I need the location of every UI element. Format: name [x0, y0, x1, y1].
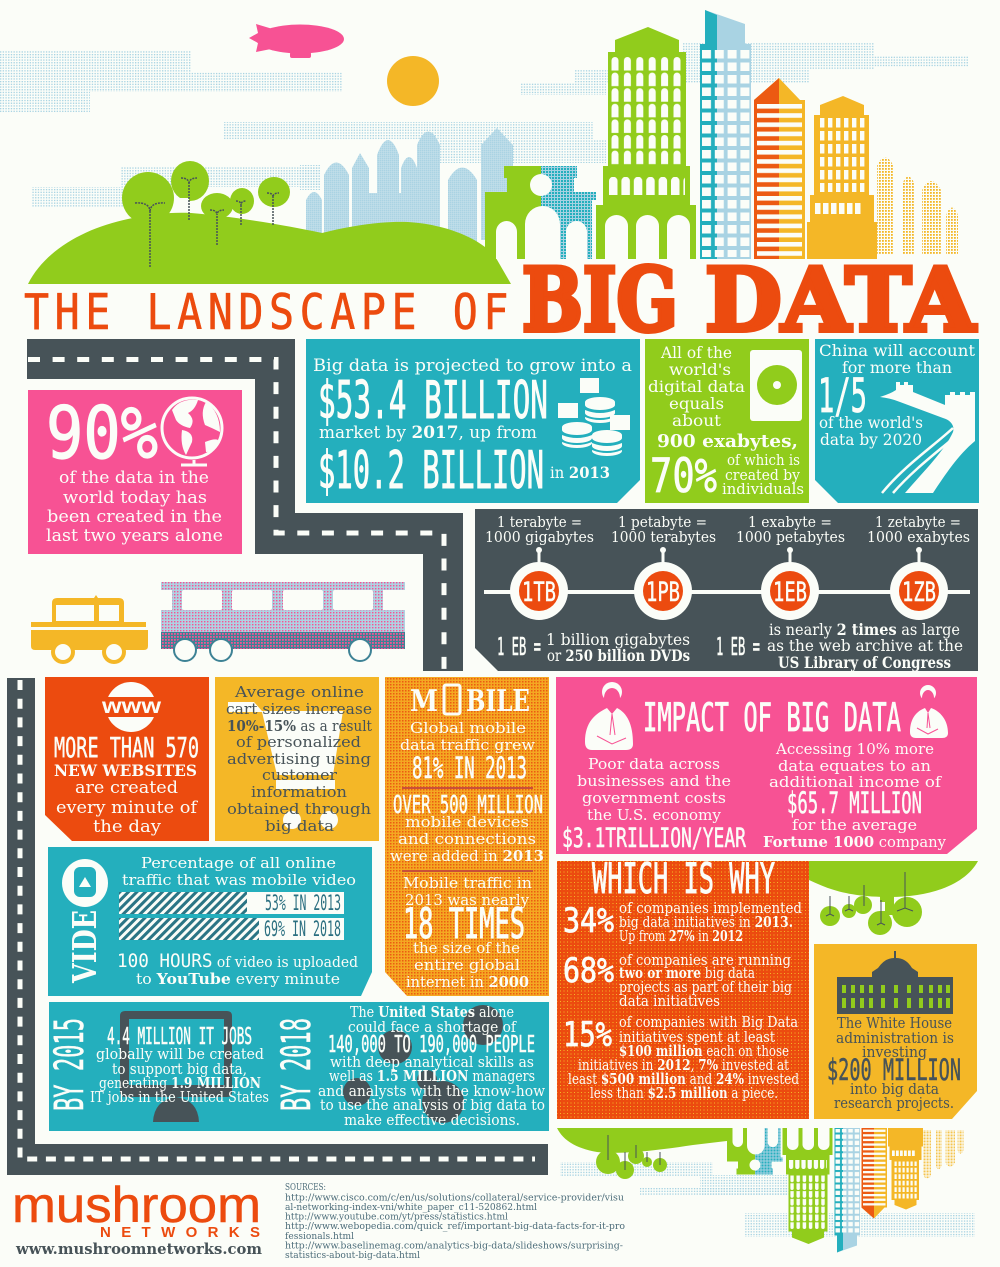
shortage text: The United States alone — [350, 1003, 514, 1021]
stat: devices: OVER 500 MILLION — [393, 790, 543, 819]
text — [819, 341, 976, 449]
icon: www globe: www — [101, 695, 162, 718]
eb comparison left: 1 billion gigabytes — [546, 630, 690, 649]
definitions: 1000 exabytes — [867, 528, 970, 546]
text: data by 2020 — [820, 430, 922, 449]
stat: 18 times: 2013 was nearly — [405, 891, 530, 909]
heading — [410, 684, 530, 719]
text: of personalized — [236, 733, 361, 751]
stat: 15 percent: initiatives in 2012, 7% invested at — [578, 1056, 789, 1074]
clouds — [0, 42, 969, 207]
sun — [387, 56, 439, 106]
definitions: 1000 terabytes — [611, 528, 716, 546]
jobs text: 4.4 MILLION IT JOBS — [107, 1024, 252, 1050]
eb comparison right: as the web archive at the — [767, 636, 963, 655]
intro text: world's — [669, 360, 731, 379]
stat: traffic growth: data traffic grew — [400, 736, 535, 754]
panel: new websites — [45, 677, 209, 841]
right text: data equates to an — [778, 757, 931, 775]
left text: businesses and the — [577, 772, 731, 790]
timeline: 1PB — [646, 577, 680, 608]
stat: 68 percent: projects as part of their big — [619, 978, 792, 996]
panel: white house — [814, 944, 977, 1119]
text: are created — [75, 778, 178, 798]
icon: monitor — [120, 1011, 232, 1122]
stat: 18 times: Mobile traffic in — [403, 874, 532, 892]
timeline: 1ZB — [902, 577, 936, 608]
eb comparison right: 1 EB = — [716, 632, 760, 661]
icon: database stacks — [558, 378, 630, 456]
intro text: digital data — [648, 377, 745, 396]
sources: fessionals.html — [285, 1231, 354, 1242]
intro: Percentage of all online — [141, 854, 336, 872]
timeline: 1EB — [773, 577, 807, 608]
stat: 15 percent: $100 million each on those — [619, 1042, 789, 1060]
definitions: 1000 petabytes — [736, 528, 845, 546]
heading: M — [410, 684, 438, 719]
definitions: 1 zetabyte = — [875, 513, 961, 531]
text: Average online — [234, 683, 364, 701]
shortage text: 140,000 TO 190,000 PEOPLE — [328, 1032, 535, 1058]
sources: SOURCES: — [285, 1182, 326, 1193]
body text — [46, 468, 223, 546]
eb comparison right: is nearly 2 times as large — [769, 620, 960, 639]
body text: of the data in the — [59, 468, 209, 488]
panel: video — [48, 847, 372, 996]
text: obtained through — [227, 800, 371, 818]
definitions: 1 exabyte = — [748, 513, 832, 531]
intro: traffic that was mobile video — [122, 871, 356, 889]
bar chart: 69% IN 2018 — [264, 917, 341, 941]
blimp — [249, 24, 344, 58]
heading: by 2015: BY 2015 — [47, 1018, 93, 1111]
sources: http://www.youtube.com/yt/press/statistics.html — [285, 1212, 508, 1222]
panel: impact — [556, 677, 977, 854]
text: of the world's — [819, 413, 923, 432]
intro text: equals — [669, 394, 724, 413]
panel: online carts — [215, 677, 379, 841]
left text: Poor data across — [588, 755, 720, 773]
vertical word: video: VIDE — [65, 910, 104, 984]
year line: in 2013 — [550, 463, 610, 482]
eb comparison left: 1 EB = — [497, 632, 541, 661]
stat: devices: mobile devices — [405, 813, 529, 831]
tree trunks — [135, 178, 279, 267]
yellow tower — [807, 96, 877, 259]
left text — [562, 755, 746, 854]
text: investing — [862, 1043, 927, 1061]
bar chart: 53% IN 2013 — [265, 891, 341, 915]
stat: 34 percent: of companies implemented — [619, 899, 802, 917]
stat: 68 percent: 68% — [563, 951, 614, 991]
body text: world today has — [63, 488, 207, 508]
left text: the U.S. economy — [587, 806, 722, 824]
green tower — [596, 27, 696, 259]
logo url: www.mushroomnetworks.com — [15, 1240, 262, 1258]
shortage text: to use the analysis of big data to — [320, 1096, 545, 1114]
text: for more than — [842, 358, 952, 377]
text — [226, 683, 372, 835]
orange tower — [754, 78, 805, 259]
eb comparison right: US Library of Congress — [778, 653, 951, 672]
jobs text: IT jobs in the United States — [90, 1088, 269, 1106]
caption: individuals — [722, 480, 804, 498]
inverted trees upper right — [809, 861, 978, 935]
youtube fact: 100 HOURS of video is uploaded — [117, 950, 358, 972]
youtube fact — [117, 950, 358, 988]
stat: 34 percent: big data initiatives in 2013. — [619, 913, 793, 931]
arch building — [485, 166, 596, 259]
title line: the landscape of: THE LANDSCAPE OF — [24, 284, 509, 341]
logo subtitle: NETWORKS — [100, 1224, 260, 1241]
youtube fact: to YouTube every minute — [136, 970, 340, 988]
icon: gears — [343, 1005, 503, 1123]
sources: http://www.cisco.com/c/en/us/solutions/collateral/service-provider/visu — [285, 1192, 624, 1204]
jobs text — [90, 1024, 269, 1106]
heading: BILE — [466, 684, 530, 719]
stat: 68 percent — [563, 951, 792, 1010]
shortage text: and analysts with the know-how — [318, 1082, 545, 1100]
panel: 900 exabytes — [645, 339, 809, 504]
icon: great wall — [880, 382, 975, 493]
market line: market by 2017, up from — [319, 423, 537, 443]
stat: devices: were added in 2013 — [390, 847, 544, 865]
body text: been created in the — [47, 507, 222, 527]
text: the day — [93, 817, 161, 837]
left text: government costs — [582, 789, 726, 807]
big number: 90% — [46, 391, 158, 475]
shortage text: could face a shortage of — [348, 1018, 517, 1036]
eb comparison right — [716, 620, 963, 672]
stat: 68 percent: two or more big data — [619, 964, 755, 982]
timeline — [484, 547, 970, 620]
text — [827, 1014, 961, 1112]
text: China will account — [819, 341, 976, 360]
jobs text: to support big data, — [112, 1060, 247, 1078]
eb comparison left: or 250 billion DVDs — [547, 646, 690, 665]
title word: big: BIG — [522, 248, 678, 352]
jobs text: globally will be created — [96, 1045, 264, 1063]
intro — [122, 854, 356, 889]
stat: 15 percent: of companies with Big Data — [619, 1013, 798, 1031]
panel: data units — [475, 509, 978, 672]
stat: 34 percent: 34% — [563, 901, 614, 941]
title — [24, 248, 977, 352]
text: NEW WEBSITES — [54, 761, 197, 780]
definitions: 1000 gigabytes — [485, 528, 594, 546]
text: research projects. — [834, 1094, 954, 1112]
mirrored clouds — [560, 1162, 975, 1237]
right text: Fortune 1000 company — [763, 833, 947, 851]
text: advertising using — [227, 750, 371, 768]
definitions — [485, 513, 970, 546]
logo wordmark: mushroom — [12, 1177, 261, 1233]
icon: left person — [585, 682, 633, 750]
stat: 68 percent: of companies are running — [619, 951, 791, 969]
panel: china — [815, 339, 979, 503]
stat: devices — [390, 790, 544, 865]
stat: traffic growth: 81% IN 2013 — [412, 751, 527, 785]
icon: taxi — [31, 595, 148, 664]
stat: traffic growth — [400, 719, 535, 785]
icon: right person — [910, 685, 948, 738]
sources — [285, 1182, 625, 1261]
shortage text: well as 1.5 MILLION managers — [329, 1067, 535, 1085]
right text: Accessing 10% more — [775, 740, 934, 758]
emphasis: 900 exabytes, — [657, 431, 798, 452]
definitions: 1 petabyte = — [618, 513, 707, 531]
text: into big data — [850, 1080, 939, 1098]
panel: market growth — [306, 339, 640, 503]
stat: 18 times — [403, 874, 532, 991]
text: administration is — [836, 1029, 954, 1047]
panel: which is why — [557, 854, 809, 1119]
jobs text: generating 1.9 MILLION — [99, 1074, 261, 1092]
sources: statistics-about-big-data.html — [285, 1250, 420, 1261]
road: upper — [27, 339, 463, 671]
panel: mobile — [385, 677, 549, 996]
shortage text — [318, 1003, 545, 1129]
stat: 18 times: 18 TIMES — [403, 899, 525, 948]
figure: 10.2 billion: $10.2 BILLION — [318, 441, 544, 501]
text: 10%-15% as a result — [227, 717, 372, 735]
city — [485, 10, 958, 259]
intro text: about — [672, 411, 722, 430]
right text — [763, 740, 947, 851]
intro text: All of the — [660, 343, 732, 362]
stat: devices: and connections — [398, 830, 536, 848]
intro line: Big data is projected to grow into a — [313, 356, 632, 376]
heading: by 2018: BY 2018 — [274, 1018, 320, 1111]
stat: 15 percent: least $500 million and 24% invested — [568, 1070, 799, 1088]
left text: $3.1TRILLION/YEAR — [562, 823, 746, 854]
icon: www globe — [100, 682, 162, 732]
stat: 15 percent — [563, 1013, 799, 1102]
icon: white house — [837, 951, 953, 1014]
icon: play button — [62, 859, 108, 907]
timeline: 1TB — [522, 577, 556, 608]
text: cart sizes increase — [226, 700, 372, 718]
stat: 18 times: the size of the — [413, 939, 520, 957]
logo — [12, 1177, 262, 1258]
tree crowns — [122, 161, 290, 224]
icon: cart — [228, 702, 343, 829]
text: customer — [262, 766, 338, 784]
icon: bus — [161, 582, 405, 661]
road: lower — [7, 678, 548, 1175]
stat: 15 percent: initiatives spent at least — [619, 1028, 775, 1046]
stat: 15 percent: 15% — [563, 1015, 612, 1055]
right text: for the average — [792, 816, 917, 834]
text: big data — [265, 817, 334, 835]
sources: http://www.webopedia.com/quick_ref/important-big-data-facts-for-it-pro — [285, 1221, 625, 1232]
definitions: 1 terabyte = — [497, 513, 582, 531]
panel: 90 percent — [28, 390, 242, 554]
stat: 34 percent: Up from 27% in 2012 — [619, 927, 743, 945]
stat: 68 percent: data initiatives — [619, 992, 720, 1010]
text: every minute of — [56, 798, 199, 818]
figure: 53.4 billion: $53.4 BILLION — [318, 371, 548, 431]
bar chart — [119, 891, 344, 941]
intro text — [648, 343, 745, 430]
icon: disc — [750, 350, 802, 421]
blue tower — [700, 10, 751, 259]
text: information — [251, 783, 347, 801]
text: MORE THAN 570 — [54, 731, 199, 764]
dotted yellow skyline — [877, 158, 958, 255]
mirrored city — [727, 1128, 964, 1252]
sources: http://www.baselinemag.com/analytics-big-data/slideshows/surprising- — [285, 1240, 623, 1252]
caption: created by — [725, 466, 800, 484]
stat: 15 percent: less than $2.5 million a piece. — [590, 1084, 778, 1102]
stat: traffic growth: Global mobile — [410, 719, 526, 737]
text — [54, 731, 199, 837]
icon: globe — [162, 398, 222, 465]
caption — [722, 451, 804, 498]
body text: last two years alone — [46, 526, 223, 546]
pale skyline — [306, 128, 513, 245]
title word: data: DATA — [705, 248, 977, 352]
mirrored hill — [557, 1128, 735, 1179]
stat: 18 times: entire global — [414, 956, 520, 974]
stat: 18 times: internet in 2000 — [406, 973, 529, 991]
figure: 70 percent: 70% — [650, 449, 717, 504]
sources: al-networking-index-vni/white_paper_c11-520862.html — [285, 1202, 537, 1213]
green hills — [28, 213, 511, 284]
right text: additional income of — [769, 773, 943, 791]
text: The White House — [837, 1014, 952, 1032]
caption: of which is — [727, 451, 800, 469]
heading: WHICH IS WHY — [592, 854, 775, 903]
figure: one fifth: 1/5 — [818, 369, 867, 424]
stat: 34 percent — [563, 899, 802, 945]
shortage text: make effective decisions. — [344, 1111, 520, 1129]
eb comparison left — [497, 630, 690, 665]
panel: jobs — [47, 1002, 549, 1131]
shortage text: with deep analytical skills as — [330, 1053, 534, 1071]
